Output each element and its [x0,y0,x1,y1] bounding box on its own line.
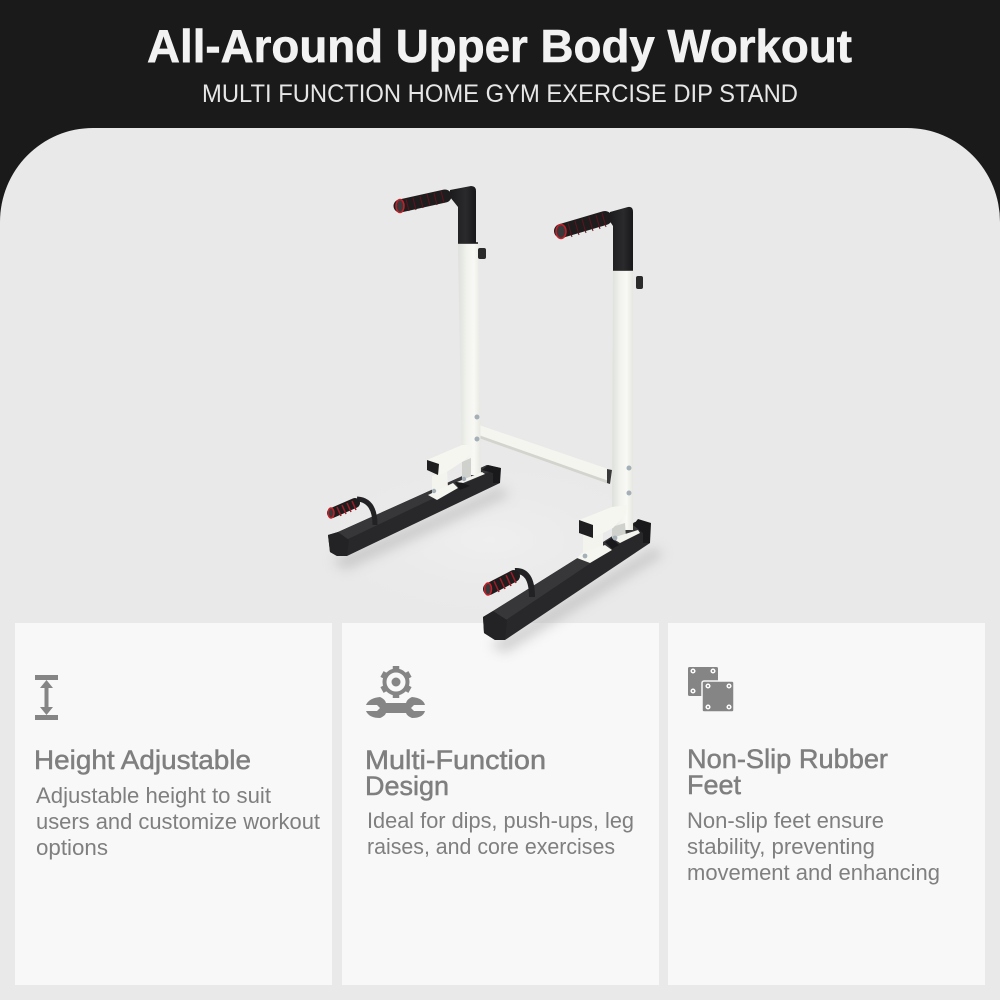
title: All-Around Upper Body Workout [147,20,852,72]
floor shadows [332,487,663,653]
heading [365,745,546,801]
right knob [636,276,643,289]
left base rail [328,465,501,556]
description [36,783,320,860]
left knob [478,248,486,259]
right upright [612,269,633,530]
left bolts [474,414,480,442]
left upright [458,242,481,475]
description: Adjustable height to suit [36,783,271,808]
right base rail [483,519,651,640]
left top grip [396,191,445,212]
description: Non-slip feet ensure [687,808,884,833]
heading: Feet [687,770,741,800]
right black bracket [609,207,633,270]
icon: gear and wrench [366,666,425,718]
heading: Multi-Function [365,745,546,775]
description: movement and enhancing [687,860,940,885]
card: non-slip rubber feet [668,623,985,985]
subtitle: MULTI FUNCTION HOME GYM EXERCISE DIP STAND [202,80,798,108]
description: users and customize workout [36,809,320,834]
icon: height arrows [35,675,58,720]
dip stand product illustration [328,186,663,653]
right top grip [556,213,606,238]
card: multi-function design [342,623,659,985]
heading [687,744,888,800]
icon: rubber pads [688,667,734,712]
heading: Design [365,771,449,801]
card: height adjustable [15,623,332,985]
left bracket [427,445,485,500]
left black bracket [450,186,476,243]
right push-up handle [484,571,532,597]
description: raises, and core exercises [367,834,615,859]
description: stability, preventing [687,834,875,859]
description [687,808,940,885]
description: Ideal for dips, push-ups, leg [367,808,634,833]
heading: Non-Slip Rubber [687,744,888,774]
right bracket [577,505,640,563]
floor glow [290,450,690,630]
crossbar [473,423,612,484]
left push-up handle [328,499,375,525]
description: options [36,835,108,860]
description [367,808,634,859]
heading: Height Adjustable [34,745,251,775]
right bolts [626,466,632,496]
